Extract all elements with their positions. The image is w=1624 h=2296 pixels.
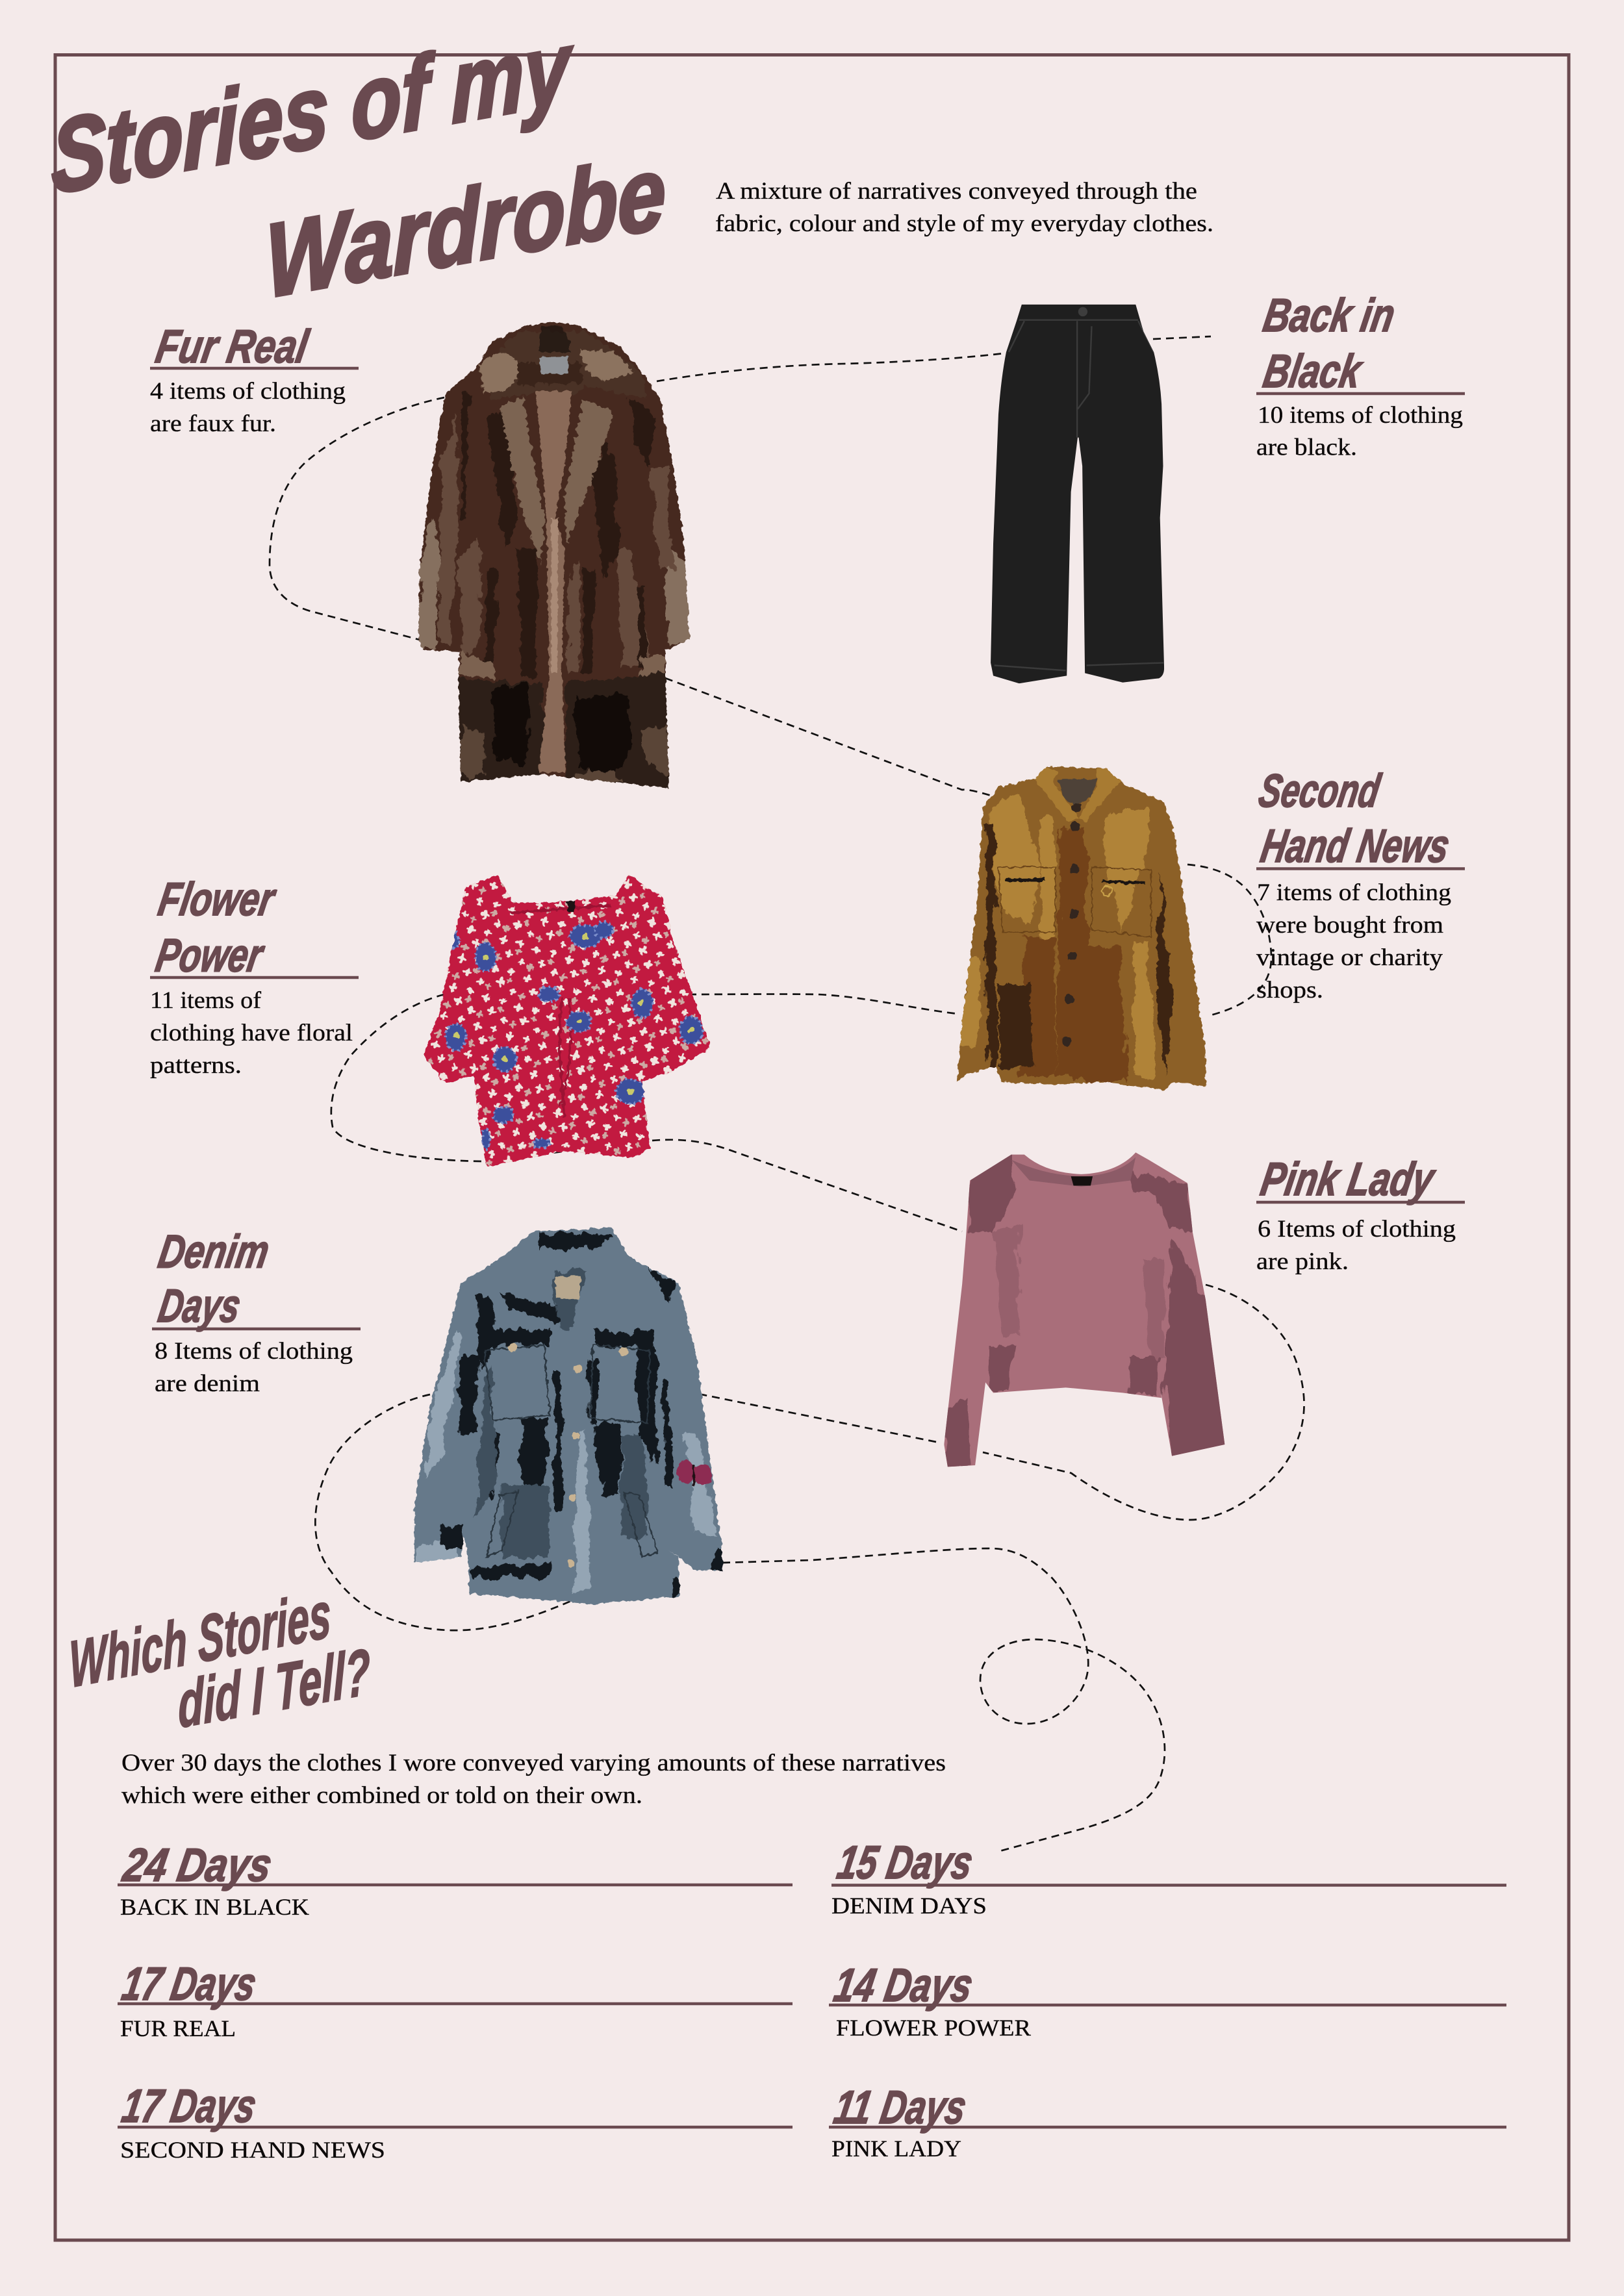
garment: pink jumper xyxy=(936,1144,1232,1476)
label: Pink Lady xyxy=(1256,1153,1465,1275)
label: Fur Real xyxy=(150,320,359,437)
stat: 11 days Pink Lady: 11 Days xyxy=(830,2081,970,2134)
label: Second Hand News: Hand News xyxy=(1257,820,1453,872)
title xyxy=(50,7,666,320)
label: Fur Real: are faux fur. xyxy=(150,410,276,437)
stat: 24 days Back in Black: 24 Days xyxy=(119,1839,275,1891)
label: Fur Real: 4 items of clothing xyxy=(150,378,346,405)
label: Pink Lady: 6 Items of clothing xyxy=(1258,1216,1456,1243)
label: Back in Black: Back in xyxy=(1260,289,1399,342)
label: Pink Lady: Pink Lady xyxy=(1257,1153,1440,1205)
stat: 17 days Fur Real xyxy=(118,1958,793,2041)
summary text: Over 30 days the clothes I wore conveyed varying amounts of these narratives xyxy=(121,1750,946,1776)
label: Fur Real: Fur Real xyxy=(152,320,313,373)
intro text: fabric, colour and style of my everyday clothes. xyxy=(715,210,1213,237)
label: Back in Black: 10 items of clothing xyxy=(1258,402,1463,429)
summary text xyxy=(121,1750,946,1809)
garment: faux fur coat xyxy=(418,322,691,788)
stat: 24 days Back in Black xyxy=(118,1839,793,1920)
label: Pink Lady: are pink. xyxy=(1256,1248,1349,1275)
label: Flower Power: 11 items of xyxy=(150,987,262,1014)
title: Wardrobe xyxy=(264,133,666,320)
stat: 17 days Second Hand News xyxy=(118,2080,793,2163)
stat: 17 days Fur Real: 17 Days xyxy=(118,1958,260,2010)
summary text: which were either combined or told on their own. xyxy=(121,1782,642,1809)
stat: 14 days Flower Power xyxy=(829,1959,1506,2041)
label: Back in Black: are black. xyxy=(1256,434,1357,461)
stat: 15 days Denim Days: DENIM DAYS xyxy=(831,1893,987,1919)
garment: mustard shirt xyxy=(952,761,1211,1098)
stat: 17 days Second Hand News: 17 Days xyxy=(118,2080,260,2132)
subheading: Which Stories did I Tell?: Which Stories xyxy=(68,1578,332,1702)
garment: red floral blouse xyxy=(424,875,711,1167)
label: Back in Black xyxy=(1256,289,1465,461)
subheading: Which Stories did I Tell? xyxy=(68,1578,371,1742)
label: Denim Days: Denim xyxy=(155,1226,273,1278)
garment: black trousers xyxy=(991,304,1164,683)
garment: denim jacket xyxy=(404,1221,735,1615)
stat: 24 days Back in Black: BACK IN BLACK xyxy=(120,1894,309,1920)
stat: 15 days Denim Days xyxy=(831,1836,1506,1919)
label: Second Hand News: shops. xyxy=(1256,977,1323,1003)
label: Second Hand News xyxy=(1255,764,1465,1003)
label: Second Hand News: vintage or charity xyxy=(1256,944,1443,971)
dashed thread connecting the garments xyxy=(270,336,1304,1852)
label: Flower Power xyxy=(150,873,359,1079)
label: Denim Days: Days xyxy=(155,1280,244,1332)
stat: 11 days Pink Lady xyxy=(829,2081,1506,2162)
label: Denim Days: are denim xyxy=(155,1370,260,1397)
stat: 17 days Second Hand News: SECOND HAND NEWS xyxy=(120,2137,385,2163)
label: Flower Power: clothing have floral xyxy=(150,1020,353,1046)
label: Flower Power: Power xyxy=(152,929,268,981)
label: Back in Black: Black xyxy=(1260,345,1367,397)
label: Denim Days: 8 Items of clothing xyxy=(155,1338,353,1365)
stat: 14 days Flower Power: 14 Days xyxy=(830,1959,976,2012)
stat: 11 days Pink Lady: PINK LADY xyxy=(831,2136,961,2162)
label: Second Hand News: Second xyxy=(1255,764,1385,817)
stat: 14 days Flower Power: FLOWER POWER xyxy=(836,2015,1031,2041)
label: Denim Days xyxy=(152,1226,361,1397)
intro text xyxy=(715,178,1213,237)
intro text: A mixture of narratives conveyed through the xyxy=(716,178,1197,205)
label: Flower Power: Flower xyxy=(155,873,280,926)
stat: 15 days Denim Days: 15 Days xyxy=(833,1836,976,1889)
label: Second Hand News: were bought from xyxy=(1256,912,1443,939)
label: Flower Power: patterns. xyxy=(150,1052,242,1079)
subheading: Which Stories did I Tell?: did I Tell? xyxy=(177,1635,371,1742)
label: Second Hand News: 7 items of clothing xyxy=(1257,879,1451,906)
stat: 17 days Fur Real: FUR REAL xyxy=(120,2015,236,2041)
